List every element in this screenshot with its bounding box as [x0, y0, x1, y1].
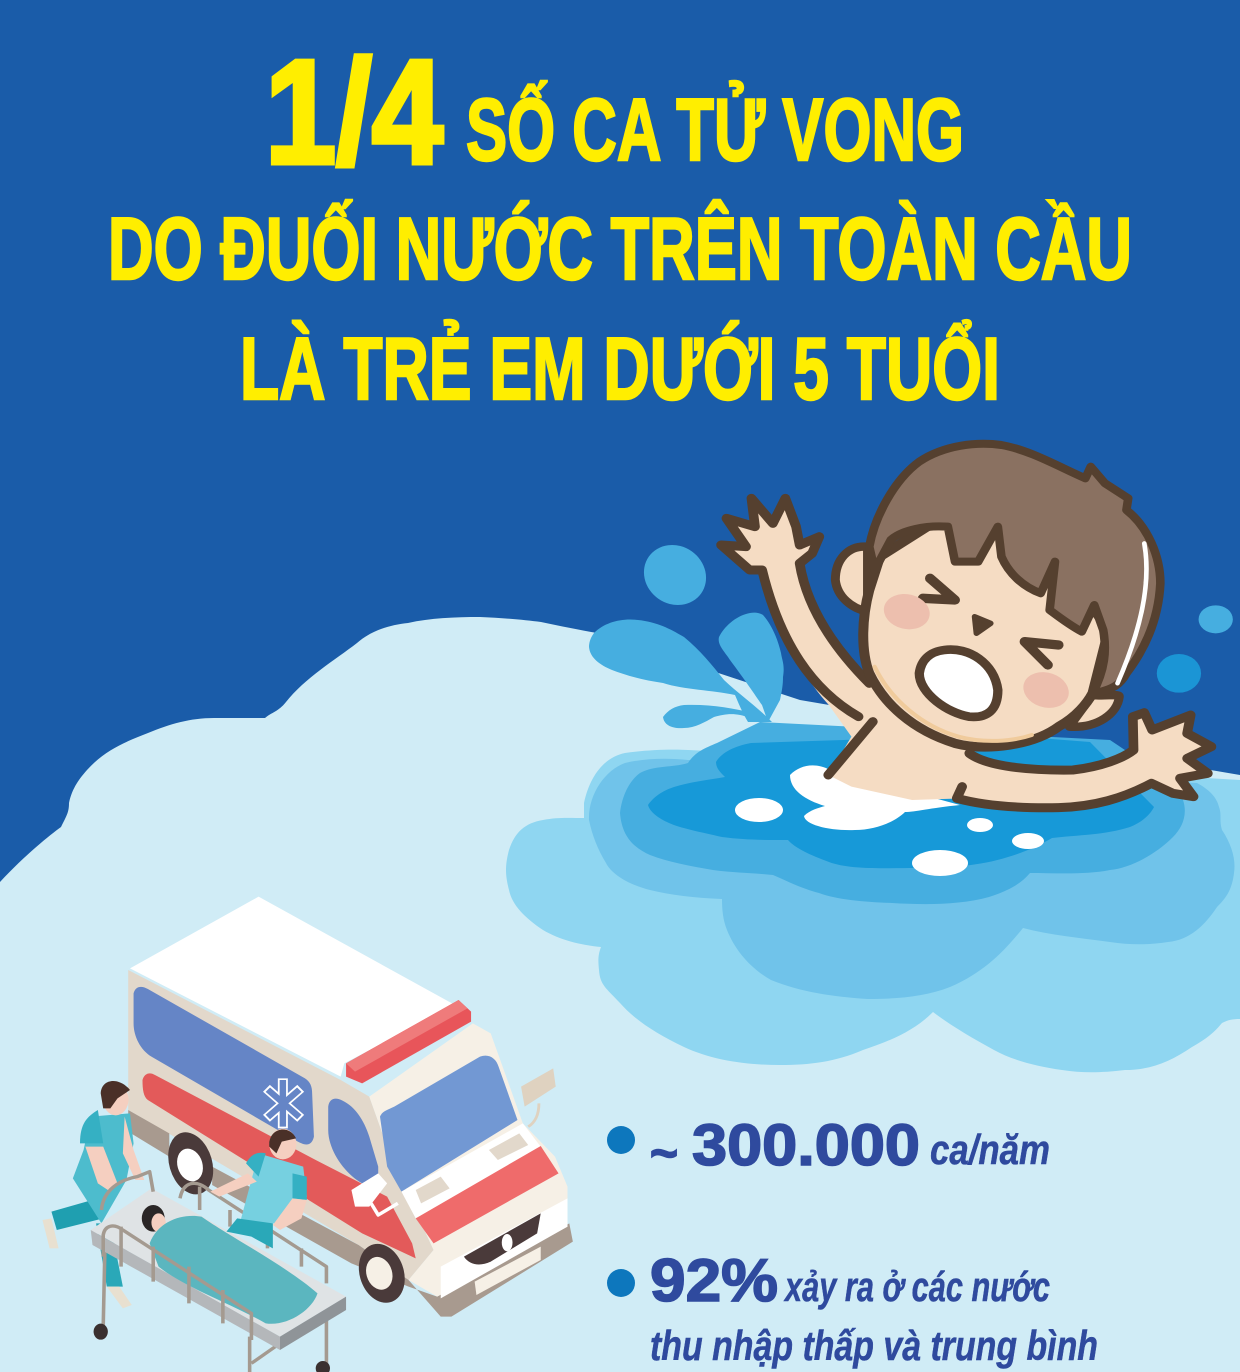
- head: [103, 1083, 129, 1115]
- front wheel: [352, 1239, 411, 1308]
- left eye: [923, 578, 955, 600]
- blanket: [150, 1216, 317, 1324]
- foam: [735, 765, 1044, 876]
- hair: [869, 444, 1160, 693]
- title line 1: SỐ CA TỬ VONG: [466, 80, 964, 179]
- outer pool: [506, 750, 1240, 1072]
- front lower: [441, 1198, 567, 1298]
- back leg: [51, 1198, 103, 1230]
- splash: [589, 533, 784, 728]
- illustration: ambulance and medics: [42, 897, 573, 1372]
- description line 1: xảy ra ở các nước: [784, 1263, 1050, 1310]
- stat: annual cases: [607, 1113, 1050, 1181]
- inner pool: [620, 722, 1185, 904]
- side mirror front: [351, 1173, 398, 1215]
- mirror: [521, 1068, 556, 1127]
- mattress side: [91, 1230, 280, 1350]
- value: 92%: [650, 1247, 778, 1314]
- deep water: [648, 735, 1154, 868]
- right arm outline: [957, 713, 1211, 808]
- star of life: [266, 1078, 301, 1128]
- legs: [103, 1243, 326, 1372]
- bullet: [607, 1269, 635, 1297]
- torso: [241, 1153, 307, 1223]
- right ear: [1069, 695, 1119, 727]
- hair highlight: [1117, 543, 1146, 683]
- mouth: [919, 650, 998, 717]
- title line 1: [265, 30, 964, 195]
- ambulance skirt: [128, 1110, 573, 1317]
- arm: [85, 1147, 117, 1192]
- value: 300.000: [692, 1113, 920, 1178]
- number plate: [475, 1247, 541, 1295]
- illustration: water pool and splash: [506, 533, 1240, 1072]
- mattress top: [91, 1188, 346, 1337]
- droplets right: [1157, 605, 1233, 693]
- rear wheel: [161, 1128, 220, 1199]
- right eye: [1025, 642, 1059, 665]
- chin shadow: [875, 667, 1032, 741]
- windshield: [380, 1056, 517, 1192]
- left ear: [835, 547, 867, 612]
- rails: [103, 1226, 251, 1340]
- front red band: [416, 1146, 559, 1243]
- mid pool: [589, 759, 1234, 999]
- medic left: [42, 1081, 144, 1308]
- light bar highlight: [346, 1000, 467, 1072]
- front leg: [96, 1223, 123, 1287]
- badge: [502, 1234, 512, 1251]
- ambulance side: [128, 970, 434, 1280]
- cheeks: [880, 589, 1074, 714]
- stretcher: [91, 1172, 346, 1372]
- nose: [975, 617, 991, 633]
- left arm: [721, 498, 894, 723]
- light blue wave area: [0, 617, 1240, 1372]
- title: [108, 30, 1132, 418]
- armpit line: [828, 722, 873, 775]
- torso: [73, 1113, 134, 1223]
- front white band: [401, 1123, 541, 1218]
- boy torso and right arm: [828, 677, 1212, 808]
- wheels: [94, 1324, 108, 1340]
- light bar: [346, 1000, 471, 1083]
- headlight strips: [416, 1133, 528, 1203]
- illustration: drowning boy: [721, 444, 1233, 808]
- left arm outline: [721, 498, 869, 717]
- cab front: [369, 1023, 567, 1297]
- description line 2: thu nhập thấp và trung bình: [650, 1322, 1098, 1369]
- value: ~: [650, 1125, 678, 1181]
- red stripe: [142, 1073, 416, 1258]
- medic right: [210, 1129, 307, 1248]
- side window: [328, 1099, 378, 1183]
- title line 1: 1/4: [265, 30, 443, 195]
- face: [863, 525, 1109, 747]
- ambulance roof: [130, 897, 455, 1077]
- grille: [464, 1213, 541, 1264]
- unit: ca/năm: [930, 1126, 1050, 1173]
- side panel: [134, 987, 314, 1144]
- patient: [142, 1205, 165, 1232]
- legs: [226, 1218, 273, 1248]
- bullet: [607, 1126, 635, 1154]
- arms: [210, 1173, 257, 1197]
- hair and head: [269, 1129, 296, 1159]
- stat: low and middle income countries: [607, 1247, 1098, 1369]
